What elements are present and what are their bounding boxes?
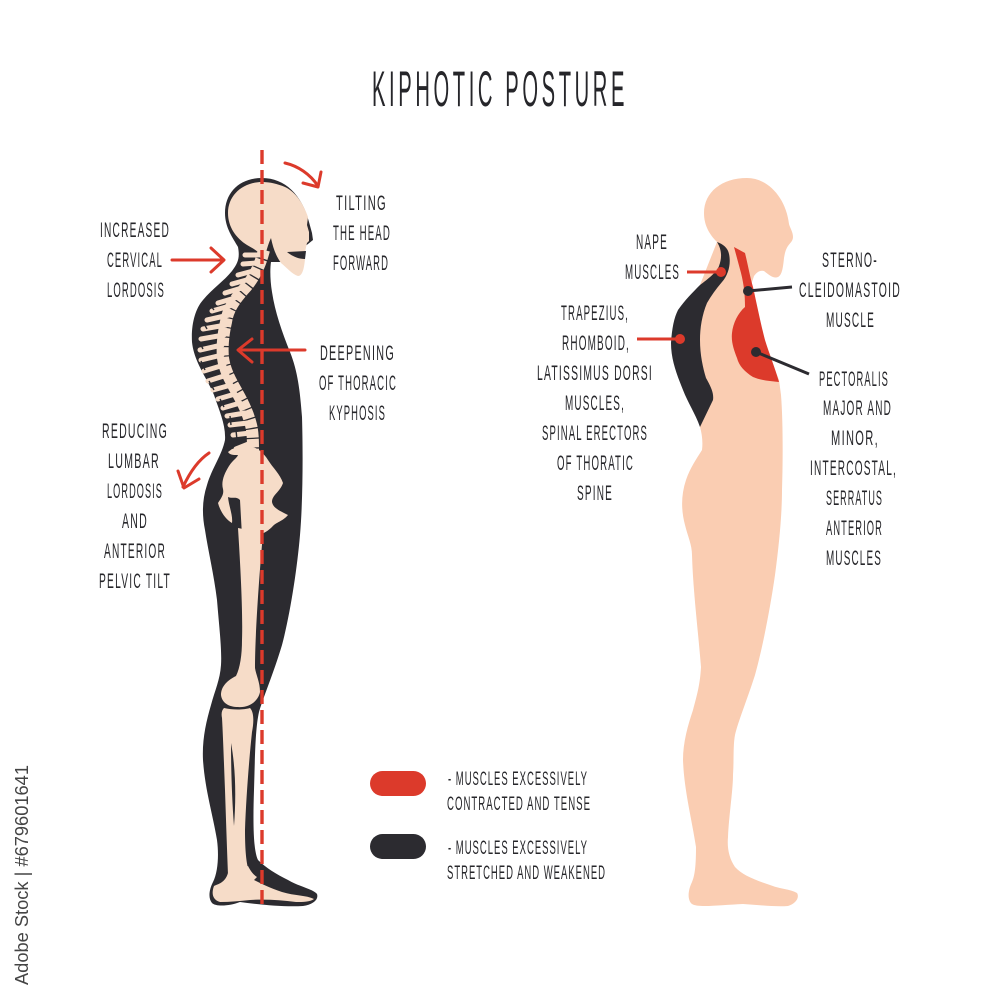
contracted chest and neck muscles bbox=[732, 247, 779, 382]
label: trapezius, rhomboid and others bbox=[537, 302, 653, 505]
label: sternocleidomastoid muscle: CLEIDOMASTOID bbox=[799, 279, 901, 302]
label: deepening of thoracic kyphosis: KYPHOSIS bbox=[329, 402, 386, 425]
text: MUSCLES bbox=[625, 261, 680, 284]
arrow: deepening thoracic kyphosis bbox=[238, 339, 305, 362]
legend bbox=[370, 769, 606, 884]
text: SPINAL ERECTORS bbox=[542, 422, 648, 445]
pointer: sternocleidomastoid bbox=[743, 286, 792, 296]
legend item: contracted muscles bbox=[370, 769, 591, 815]
arrow: reducing lumbar lordosis bbox=[178, 453, 209, 488]
arrow: head tilting forward bbox=[285, 163, 321, 187]
label: pectoralis and others: MUSCLES bbox=[826, 547, 882, 570]
label: pectoralis and others bbox=[810, 368, 897, 570]
label: tilting the head forward: TILTING bbox=[336, 192, 387, 215]
legend item: stretched muscles bbox=[370, 834, 606, 884]
legend item: contracted muscles: - MUSCLES EXCESSIVELY bbox=[448, 769, 588, 790]
label: pectoralis and others: MINOR, bbox=[831, 427, 879, 450]
legend item: stretched muscles: - MUSCLES EXCESSIVELY bbox=[448, 838, 588, 859]
text: INTERCOSTAL, bbox=[810, 457, 897, 480]
vertical plumb line bbox=[260, 150, 264, 910]
label: sternocleidomastoid muscle: STERNO- bbox=[822, 249, 878, 272]
label: tilting the head forward bbox=[333, 192, 391, 275]
label: pectoralis and others: MAJOR AND bbox=[823, 397, 892, 420]
label: trapezius, rhomboid and others: RHOMBOID, bbox=[562, 332, 630, 355]
label: trapezius, rhomboid and others: SPINE bbox=[577, 482, 613, 505]
body silhouette bbox=[192, 178, 317, 906]
mouth gap bbox=[287, 251, 306, 259]
label: reducing lumbar lordosis and anterior pelvic tilt: LUMBAR bbox=[108, 450, 160, 473]
label: sternocleidomastoid muscle: MUSCLE bbox=[826, 309, 875, 332]
label: sternocleidomastoid muscle bbox=[799, 249, 901, 332]
label: reducing lumbar lordosis and anterior pelvic tilt bbox=[99, 420, 171, 593]
label: increased cervical lordosis bbox=[100, 219, 170, 302]
text: THE HEAD bbox=[333, 222, 391, 245]
stock id caption: Adobe Stock | #679601641 bbox=[12, 765, 32, 985]
text: KIPHOTIC POSTURE bbox=[372, 61, 628, 117]
text: OF THORACIC bbox=[319, 372, 397, 395]
arrow: increased cervical lordosis bbox=[172, 248, 224, 272]
label: trapezius, rhomboid and others: MUSCLES, bbox=[565, 392, 625, 415]
stretched back muscles bbox=[671, 242, 730, 427]
label: nape muscles bbox=[625, 231, 680, 284]
label: reducing lumbar lordosis and anterior pelvic tilt: REDUCING bbox=[102, 420, 168, 443]
label: reducing lumbar lordosis and anterior pelvic tilt: ANTERIOR bbox=[104, 540, 166, 563]
text: LATISSIMUS DORSI bbox=[537, 362, 653, 385]
text: PELVIC TILT bbox=[99, 570, 171, 593]
legend item: contracted muscles: CONTRACTED AND TENSE bbox=[447, 794, 591, 815]
pointer: pectoralis bbox=[751, 347, 809, 374]
label: trapezius, rhomboid and others: OF THORATIC bbox=[557, 452, 634, 475]
text: LORDOSIS bbox=[107, 279, 165, 302]
label: nape muscles: NAPE bbox=[636, 231, 668, 254]
right figure: muscles bbox=[671, 178, 798, 906]
label: deepening of thoracic kyphosis bbox=[319, 342, 397, 425]
text: STRETCHED AND WEAKENED bbox=[447, 863, 606, 884]
text: LORDOSIS bbox=[107, 480, 163, 503]
label: reducing lumbar lordosis and anterior pelvic tilt: AND bbox=[122, 510, 148, 533]
label: increased cervical lordosis: CERVICAL bbox=[107, 249, 163, 272]
pelvis bbox=[218, 446, 288, 536]
label: deepening of thoracic kyphosis: DEEPENING bbox=[320, 342, 395, 365]
pointer: nape muscles bbox=[687, 267, 726, 277]
foot bones bbox=[213, 866, 314, 902]
skull and jaw bbox=[228, 182, 309, 276]
label: trapezius, rhomboid and others: TRAPEZIUS, bbox=[561, 302, 629, 325]
tibia and fibula bbox=[222, 708, 253, 875]
pointer: trapezius and back muscles bbox=[637, 334, 685, 344]
text: FORWARD bbox=[333, 252, 389, 275]
body silhouette bbox=[675, 178, 798, 906]
text: INCREASED bbox=[100, 219, 170, 242]
label: pectoralis and others: ANTERIOR bbox=[826, 517, 883, 540]
femur bbox=[221, 528, 263, 707]
text: PECTORALIS bbox=[819, 368, 889, 391]
label: pectoralis and others: SERRATUS bbox=[826, 487, 883, 510]
spine bbox=[199, 250, 264, 452]
left figure: skeleton posture bbox=[192, 178, 317, 906]
